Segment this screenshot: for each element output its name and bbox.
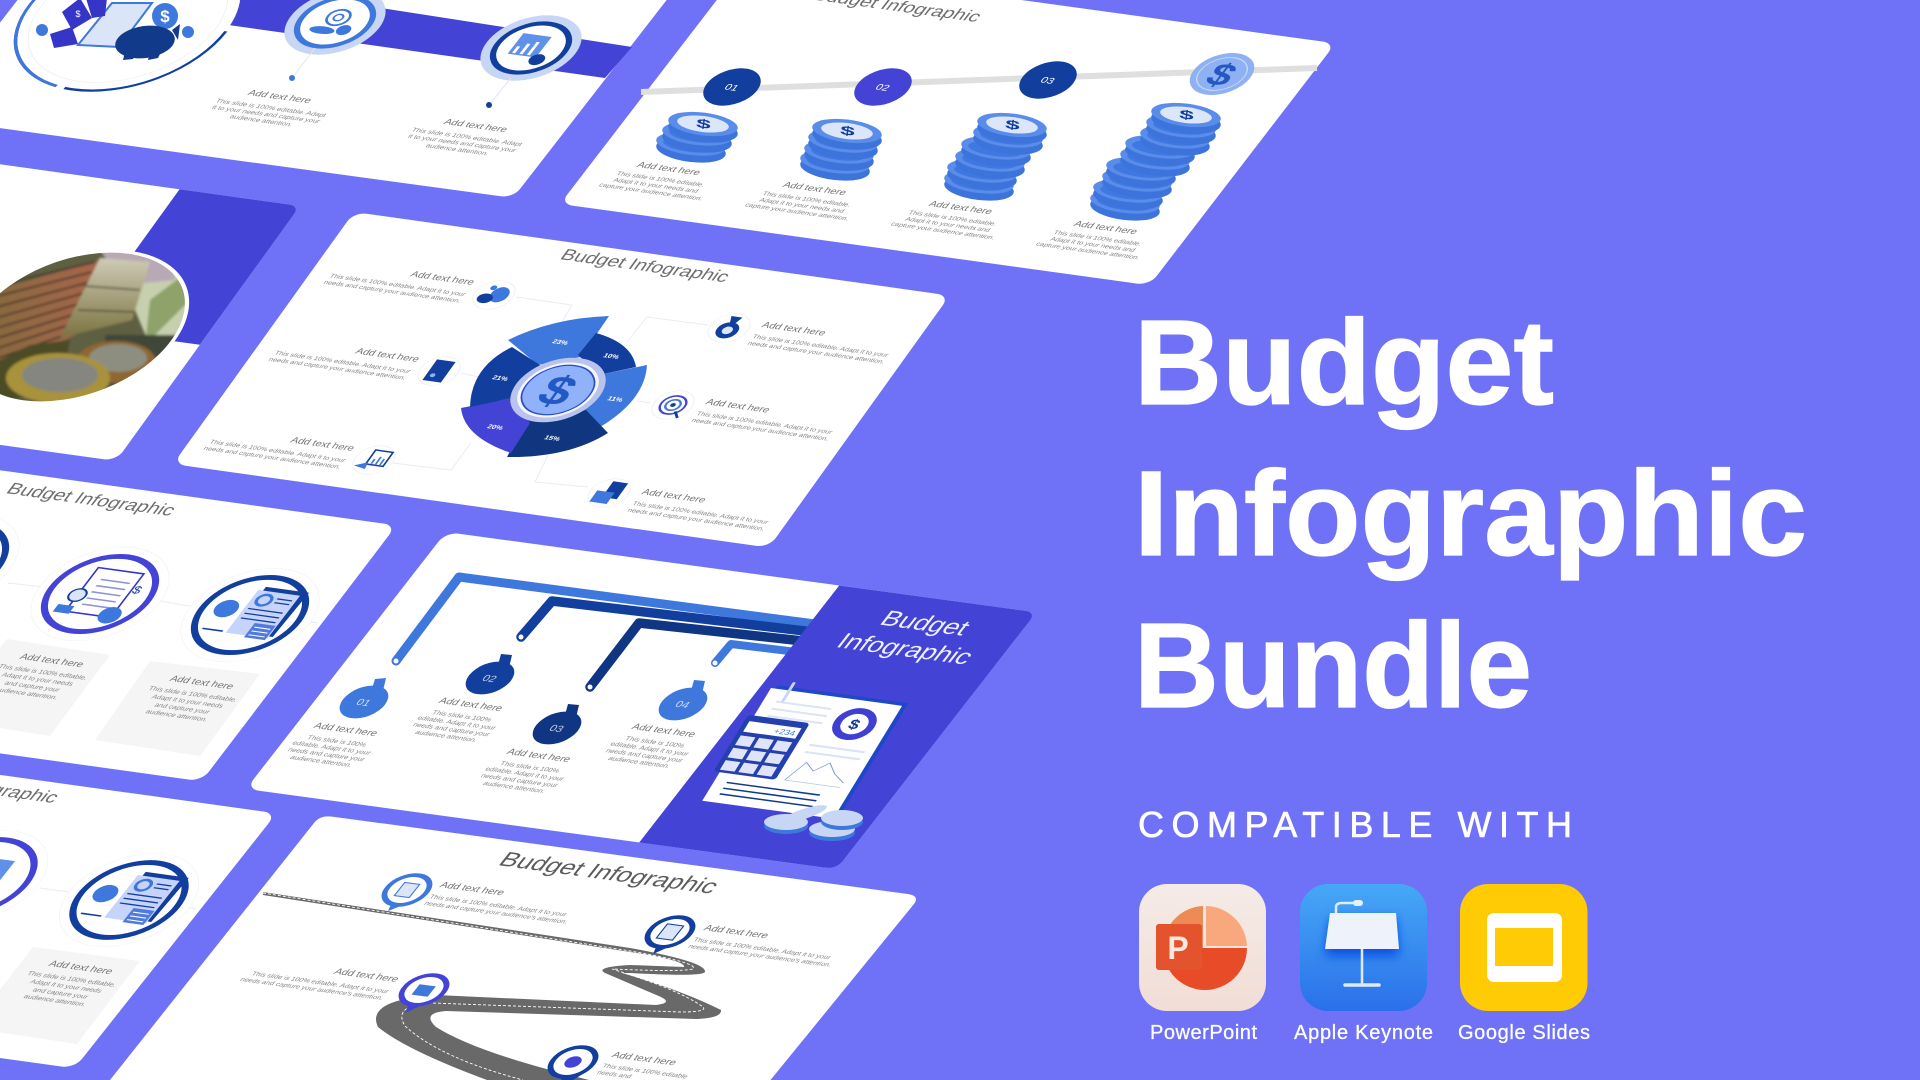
step marker 01	[693, 65, 771, 109]
text block: step 4: Add text here	[1071, 220, 1140, 237]
icon: target search	[644, 388, 702, 422]
text block: first item	[204, 86, 337, 131]
slide: coin stacks	[560, 0, 1335, 285]
calculator	[714, 715, 810, 780]
marker 04: 04	[672, 699, 692, 711]
text block: bottom right: needs and capture your audience attention.	[626, 508, 766, 532]
text block: step 1	[597, 158, 723, 202]
text box	[0, 947, 140, 1044]
marker 02: 02	[479, 673, 499, 685]
icon ring: document with coins: $	[129, 584, 146, 596]
text block: 03	[473, 747, 581, 796]
text block: 04: This slide is 100%	[623, 735, 687, 750]
branch end dots	[394, 634, 718, 690]
text block: pin 3	[238, 957, 402, 1002]
text block: step 1: This slide is 100% editable.	[615, 171, 706, 188]
branch line 2	[521, 601, 830, 637]
panel heading: Budget	[875, 606, 977, 640]
location pin 4	[542, 1045, 604, 1080]
text block: top right: This slide is 100% editable. Adapt it to your	[751, 334, 890, 359]
heading: Budget Infographic	[493, 848, 724, 898]
text block: middle left: Add text here	[353, 347, 422, 364]
text block: first: Add text here	[17, 652, 86, 670]
photo border	[0, 237, 230, 417]
branch line 1	[396, 577, 830, 661]
icon ring: document with bulb	[155, 561, 345, 669]
labels: 15%	[542, 434, 562, 443]
road dashes	[263, 893, 704, 1080]
labels	[485, 338, 625, 443]
text block: 01: Add text here	[311, 722, 380, 739]
text block: pin 1: Add text here	[437, 881, 507, 898]
text block: 04	[598, 722, 706, 771]
text block: pin 4: This slide is 100% editable	[600, 1063, 689, 1080]
labels: 21%	[490, 374, 510, 383]
labels: 10%	[601, 352, 621, 361]
text block: Add text here	[46, 960, 115, 977]
coin stack 1: $	[695, 116, 712, 132]
text block: 02	[405, 696, 513, 745]
text block: step 1: capture your audience attention.	[597, 183, 704, 202]
panel heading	[831, 602, 1000, 669]
text block: first item: audience attention.	[228, 113, 294, 128]
slide: hanging markers with calculator	[246, 532, 1036, 869]
slide: road map	[110, 816, 916, 1080]
icon ring: document with bulb	[33, 846, 225, 954]
text block: Adapt it to your needs	[28, 978, 105, 994]
connectors	[392, 297, 708, 487]
segment 10%	[578, 333, 636, 375]
icon: report chart	[462, 10, 600, 86]
text block: bottom right: This slide is 100% editable. Adapt it to your	[631, 501, 770, 526]
text block: bottom left: This slide is 100% editable. Adapt it to your	[208, 439, 347, 464]
text block: 01: This slide is 100%	[305, 734, 369, 749]
text block: 01: audience attention.	[288, 753, 355, 769]
branch line 3	[590, 623, 830, 687]
text block: bottom left	[202, 426, 357, 470]
icon: card	[410, 354, 468, 388]
text block: pin 3: This slide is 100% editable. Adapt it to your	[250, 971, 391, 995]
text block	[8, 958, 128, 1010]
text block: step 3: capture your audience attention.	[889, 222, 996, 241]
location pin 2	[639, 915, 701, 954]
connector dot: first	[289, 75, 295, 81]
step marker 02	[844, 65, 922, 109]
text block: second: Adapt it to your needs	[150, 693, 225, 710]
text block: second: audience attention.	[144, 708, 210, 723]
text block: step 3: Add text here	[926, 200, 995, 217]
text block: pin 3: Add text here	[331, 967, 401, 984]
marker 01	[331, 678, 397, 721]
icon ring: partial	[0, 823, 74, 931]
text block: first	[0, 651, 99, 703]
text block: step 1: Add text here	[634, 161, 703, 178]
text block: middle left: needs and capture your audience attention.	[267, 357, 407, 381]
text block: 02: audience attention.	[413, 728, 480, 744]
marker 02	[457, 654, 523, 697]
illustration: coins	[764, 802, 863, 841]
step marker 03: 03	[1038, 75, 1057, 86]
coin stack 4	[1089, 99, 1222, 224]
icon: piggy bank with money: $	[160, 7, 170, 26]
labels: 20%	[485, 423, 505, 432]
panel heading: Infographic	[831, 628, 980, 669]
label: Google Slides: Google Slides	[1458, 1022, 1590, 1044]
title: Infographic	[1134, 445, 1807, 581]
slide: coin photo	[0, 164, 296, 460]
text block: pin 1	[422, 881, 585, 925]
text block: top left: needs and capture your audience attention.	[322, 280, 462, 304]
icon ring: partial left	[0, 507, 45, 615]
segment 21%	[470, 347, 540, 407]
text block: step 3: Adapt it to your needs and	[903, 217, 992, 233]
text block: 03: audience attention.	[481, 779, 548, 795]
text block: step 4: This slide is 100% editable.	[1052, 230, 1143, 247]
text block: 04: audience attention.	[606, 754, 673, 770]
segment 11%	[576, 365, 647, 427]
text block: audience attention.	[22, 992, 88, 1008]
coin stack 3: $	[1004, 117, 1021, 133]
text box: first	[0, 639, 110, 736]
icon: PowerPoint	[1139, 884, 1266, 1011]
side panel	[639, 585, 1036, 869]
text block: middle left	[267, 337, 422, 381]
donut chart	[461, 316, 647, 457]
text block: pin 4: needs and	[595, 1070, 633, 1080]
text block: second: and capture your	[153, 702, 212, 716]
text block: 02: editable. Adapt it to your	[415, 714, 499, 732]
text block: top right: needs and capture your audience attention.	[746, 341, 886, 365]
text block: 01	[280, 721, 388, 770]
heading: Budget Infographic	[556, 247, 734, 286]
text block: middle right: Add text here	[703, 398, 772, 415]
text block: first item: Add text here	[245, 89, 314, 106]
slide: circles with boxes upper	[0, 443, 396, 781]
step marker 03	[1009, 58, 1087, 102]
connectors	[40, 888, 196, 909]
text block: second: Add text here	[167, 674, 236, 692]
text block: first item: This slide is 100% editable. Adapt	[214, 98, 328, 119]
text block: second item	[400, 115, 533, 160]
step marker 01: 01	[722, 82, 741, 93]
branch line 4	[715, 644, 830, 663]
icon: piggy and bulb	[465, 278, 523, 312]
coin stack 2	[799, 115, 883, 184]
segment 23%	[508, 316, 609, 365]
step marker 02: 02	[873, 82, 892, 93]
text block: middle left: This slide is 100% editable. Adapt it to your	[273, 350, 412, 375]
coin stack 2: $	[839, 123, 856, 139]
side panel	[79, 189, 300, 345]
heading: Budget Infographic	[2, 480, 180, 520]
title: Budget	[1134, 294, 1554, 430]
marker 03: 03	[546, 723, 566, 735]
text block: pin 4	[595, 1051, 699, 1080]
text block: first: and capture your	[3, 680, 62, 694]
icon: money bag	[700, 311, 758, 345]
text block: step 4	[1034, 217, 1160, 261]
text block: first: Adapt it to your needs	[0, 671, 75, 688]
text block: 01: editable. Adapt it to your	[290, 739, 374, 757]
icon: Apple Keynote	[1300, 884, 1427, 1011]
timeline bar	[641, 68, 1317, 92]
text block: first item: it to your needs and capture your	[210, 104, 322, 125]
marker 01: 01	[353, 697, 373, 709]
slide: piggy bank timeline	[0, 0, 700, 198]
text block: pin 2: Add text here	[701, 924, 771, 941]
text block: second item: This slide is 100% editable. Adapt	[410, 127, 524, 148]
text block: pin 2: needs and capture your audience's attention.	[686, 944, 833, 968]
text block: 04: editable. Adapt it to your	[608, 740, 692, 758]
icon: piggy bank with money	[36, 0, 194, 62]
text block: top left: This slide is 100% editable. Adapt it to your	[328, 273, 467, 298]
segment 15%	[507, 410, 608, 457]
marker 03	[524, 704, 590, 747]
text block: step 1: Adapt it to your needs and	[611, 178, 700, 194]
icon: report	[580, 476, 638, 510]
coin stack 4: $	[1178, 107, 1195, 123]
label: Apple Keynote: Apple Keynote	[1294, 1022, 1433, 1044]
connector dot: second	[486, 102, 492, 108]
text block: step 2: Adapt it to your needs and	[757, 198, 846, 214]
text block: second item: audience attention.	[424, 142, 490, 157]
large circle	[0, 0, 281, 103]
coin stack 3	[943, 109, 1048, 204]
text block: pin 1: needs and capture your audience's attention.	[422, 901, 569, 925]
text block: 04: Add text here	[629, 723, 698, 740]
text box: second	[95, 661, 260, 756]
marker 04	[650, 680, 716, 723]
slide: circles with boxes lower	[0, 731, 276, 1068]
text block: bottom left: Add text here	[288, 436, 357, 453]
text block: top left	[322, 260, 477, 304]
text block: step 2: This slide is 100% editable.	[761, 191, 852, 208]
icon: dollar coin	[1178, 50, 1266, 98]
text block: step 2	[743, 178, 869, 222]
illustration: document and calculator: $	[845, 717, 863, 733]
text block: 03: needs and capture your	[479, 772, 561, 789]
text block: step 2: Add text here	[780, 181, 849, 198]
label: PowerPoint: PowerPoint	[1150, 1022, 1257, 1044]
coin stack 1	[655, 108, 739, 166]
icon: piggy bank with money: $	[75, 9, 81, 19]
text block: pin 2: This slide is 100% editable. Adapt it to your	[692, 937, 833, 961]
text block: 03: This slide is 100%	[498, 760, 562, 775]
text block: second item: it to your needs and capture your	[406, 133, 518, 154]
photo: coins	[0, 252, 185, 402]
location pin 3	[393, 973, 455, 1013]
text block: 03: editable. Adapt it to your	[483, 765, 567, 783]
text block: second: This slide is 100% editable.	[147, 685, 239, 704]
text block: 01: needs and capture your	[286, 746, 368, 763]
text block: pin 3: needs and capture your audience's attention.	[238, 977, 385, 1001]
icon: target	[266, 0, 404, 60]
segment 20%	[461, 398, 530, 453]
text block: middle right: needs and capture your audience attention.	[690, 418, 830, 442]
text block: middle right: This slide is 100% editable. Adapt it to your	[695, 411, 834, 436]
connector: second stem	[489, 78, 511, 105]
text block: 03: Add text here	[504, 748, 573, 765]
text block: step 3	[889, 197, 1015, 241]
labels: 11%	[606, 395, 625, 404]
text block: pin 4: Add text here	[609, 1051, 679, 1068]
text block: step 4: capture your audience attention.	[1034, 242, 1141, 261]
text block: and capture your	[31, 986, 91, 1000]
text block: pin 2	[686, 924, 849, 968]
text block: bottom left: needs and capture your audience attention.	[202, 446, 342, 470]
slide: donut chart	[173, 212, 950, 548]
subtitle: COMPATIBLE WITH	[1138, 804, 1572, 845]
center medallion: $	[527, 366, 588, 415]
text block: step 4: Adapt it to your needs and	[1048, 237, 1137, 253]
connectors	[8, 583, 318, 623]
icon: Google Slides	[1460, 884, 1588, 1011]
text block: bottom right: Add text here	[639, 488, 708, 505]
text block: bottom right	[626, 488, 780, 532]
winding road	[263, 892, 721, 1080]
text block: middle right	[690, 398, 844, 442]
text block: This slide is 100% editable.	[25, 969, 119, 989]
text block: top right	[746, 321, 900, 365]
text block: 02: needs and capture your	[411, 721, 493, 738]
text block: top right: Add text here	[759, 321, 828, 338]
text block: step 3: This slide is 100% editable.	[907, 210, 998, 227]
icon: browser chart	[345, 443, 403, 477]
illustration: document and calculator	[696, 680, 911, 819]
icon: PowerPoint: P	[1167, 930, 1189, 966]
title	[1134, 294, 1807, 733]
text block: top left: Add text here	[408, 270, 477, 287]
text block: 02: Add text here	[436, 697, 505, 714]
icon: dollar coin: $	[1197, 57, 1245, 93]
icon ring: document with coins	[5, 540, 195, 648]
calculator: +234	[772, 727, 798, 738]
text block: step 2: capture your audience attention.	[743, 203, 850, 222]
text block: second item: Add text here	[441, 118, 510, 135]
center medallion	[498, 355, 618, 425]
text block: second	[130, 673, 249, 725]
band	[200, 0, 632, 78]
text block: 04: needs and capture your	[604, 747, 686, 764]
text block: 02: This slide is 100%	[430, 709, 494, 724]
labels: 23%	[550, 338, 570, 347]
text block: pin 1: This slide is 100% editable. Adapt it to your	[428, 894, 569, 918]
location pin 1	[376, 873, 438, 911]
title: Bundle	[1134, 597, 1532, 733]
connector: first stem	[292, 48, 315, 78]
